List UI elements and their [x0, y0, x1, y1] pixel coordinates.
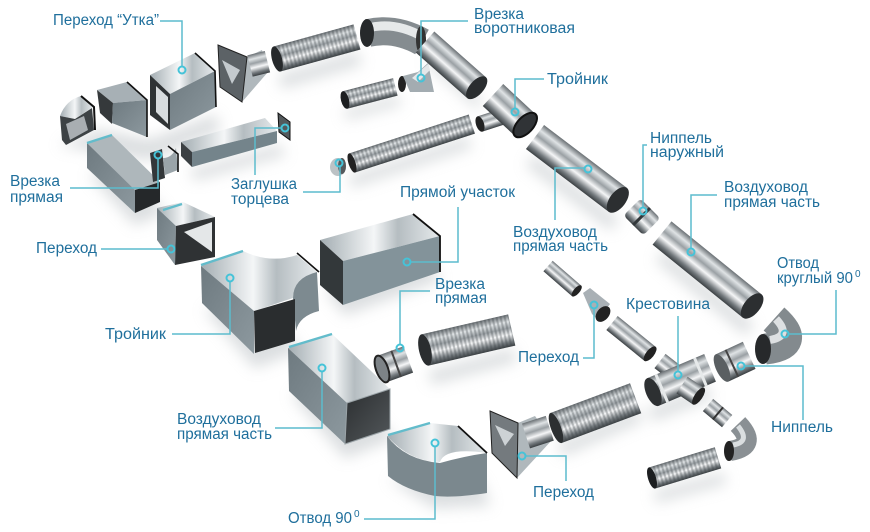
- label: Крестовина: [626, 296, 710, 378]
- large rectangular tee: [201, 251, 319, 354]
- pipe to tee: [416, 32, 491, 103]
- long rectangular duct left: [87, 135, 160, 213]
- label: Переход middle: [518, 302, 598, 366]
- spiral pipe top: [269, 24, 360, 73]
- small spiral pipe lower: [645, 447, 721, 490]
- label: Врезка прямая left: прямая: [10, 189, 63, 206]
- label: Крестовина: Крестовина: [626, 296, 710, 313]
- label: Прямой участок: Прямой участок: [400, 184, 515, 201]
- label: Переход lower: Переход: [533, 484, 594, 501]
- outer nipple: [624, 199, 660, 235]
- label: Тройник left: [105, 274, 234, 343]
- elbow top: [360, 19, 426, 54]
- label: Переход Утка: Переход “Утка”: [53, 12, 159, 29]
- pipe straight part middle: [526, 125, 633, 217]
- label: Врезка воротниковая: [418, 6, 575, 82]
- pipe straight part right: [653, 221, 768, 323]
- label: Тройник round: Тройник: [547, 71, 608, 88]
- cross fitting: [641, 354, 716, 409]
- label: Воздуховод right: [688, 179, 820, 256]
- label: Отвод круглый 90: круглый 90: [777, 270, 853, 287]
- label: Отвод 90: [288, 440, 438, 527]
- label: Врезка прямая right: прямая: [435, 290, 487, 307]
- spiral pipe lower: [546, 383, 641, 445]
- label: Воздуховод right: Воздуховод: [724, 179, 808, 196]
- label: Переход middle: Переход: [518, 349, 579, 366]
- label: Отвод 90: Отвод 90: [288, 510, 352, 527]
- label: Тройник left: Тройник: [105, 326, 166, 343]
- label: Воздуховод middle: Воздуховод: [513, 224, 597, 241]
- label: Переход left: [36, 240, 174, 257]
- end cap: [278, 113, 290, 140]
- label: Ниппель наружный: [640, 130, 724, 214]
- rectangular duct middle: [181, 118, 277, 167]
- tee round: [474, 84, 541, 141]
- label: Ниппель наружный: Ниппель: [650, 130, 712, 147]
- round-to-rect transition lower: [490, 411, 554, 478]
- small nipple lower: [703, 399, 732, 427]
- label: Врезка прямая left: [10, 152, 162, 206]
- label: Тройник round: [512, 71, 608, 116]
- label: Ниппель наружный: наружный: [650, 144, 724, 161]
- rectangular duct: elbow top left: [60, 96, 95, 145]
- soft shadows: [60, 58, 750, 508]
- rectangular duct: transition: [97, 82, 147, 137]
- cut-in fitting: [372, 346, 413, 384]
- rectangular elbow 90: [387, 423, 487, 497]
- label: Воздуховод middle: [513, 166, 608, 255]
- label: Прямой участок: [400, 184, 515, 266]
- label: Врезка прямая right: [396, 276, 487, 352]
- rectangular air duct lower: [288, 334, 390, 444]
- label: Переход left: Переход: [36, 240, 97, 257]
- round elbow 90: [755, 319, 787, 364]
- long spiral pipe and end cap: [330, 115, 475, 176]
- small pipe with tie-in: [339, 63, 434, 110]
- label: Переход lower: [518, 452, 594, 501]
- label: Врезка воротниковая: Врезка: [474, 6, 524, 23]
- label: Переход Утка: [53, 12, 186, 74]
- label: Врезка прямая right: Врезка: [435, 276, 485, 293]
- label: Отвод круглый 90: [777, 255, 861, 338]
- round-to-rect transition top: [218, 45, 270, 102]
- label: Заглушка торцева: торцева: [231, 191, 289, 208]
- label: Отвод круглый 90: Отвод: [777, 255, 819, 272]
- straight rectangular section: [320, 214, 440, 305]
- label: Воздуховод middle: прямая часть: [513, 238, 608, 255]
- rectangular duct: offset Utka: [150, 53, 216, 130]
- label: Воздуховод lower: Воздуховод: [177, 411, 261, 428]
- label: Отвод круглый 90: 0: [855, 269, 861, 280]
- label: Заглушка торцева: [231, 124, 297, 208]
- label: Воздуховод lower: прямая часть: [177, 426, 272, 443]
- transition pipe set: [543, 261, 659, 363]
- label: Воздуховод right: прямая часть: [724, 194, 820, 211]
- small curved fitting: [150, 146, 178, 182]
- label: Ниппель: [738, 362, 833, 436]
- label: Врезка прямая left: Врезка: [10, 173, 60, 190]
- nipple right: [710, 342, 756, 384]
- label: Воздуховод lower: [177, 364, 326, 443]
- label: Ниппель: Ниппель: [771, 419, 833, 436]
- small elbow: [724, 424, 747, 461]
- label: Врезка воротниковая: воротниковая: [474, 20, 575, 37]
- spiral pipe right of cut-in: [416, 314, 515, 367]
- label: end cap leader: [303, 160, 342, 192]
- label: Отвод 90: 0: [354, 509, 360, 520]
- rectangular transition: [157, 202, 215, 265]
- label: Заглушка торцева: Заглушка: [231, 176, 297, 193]
